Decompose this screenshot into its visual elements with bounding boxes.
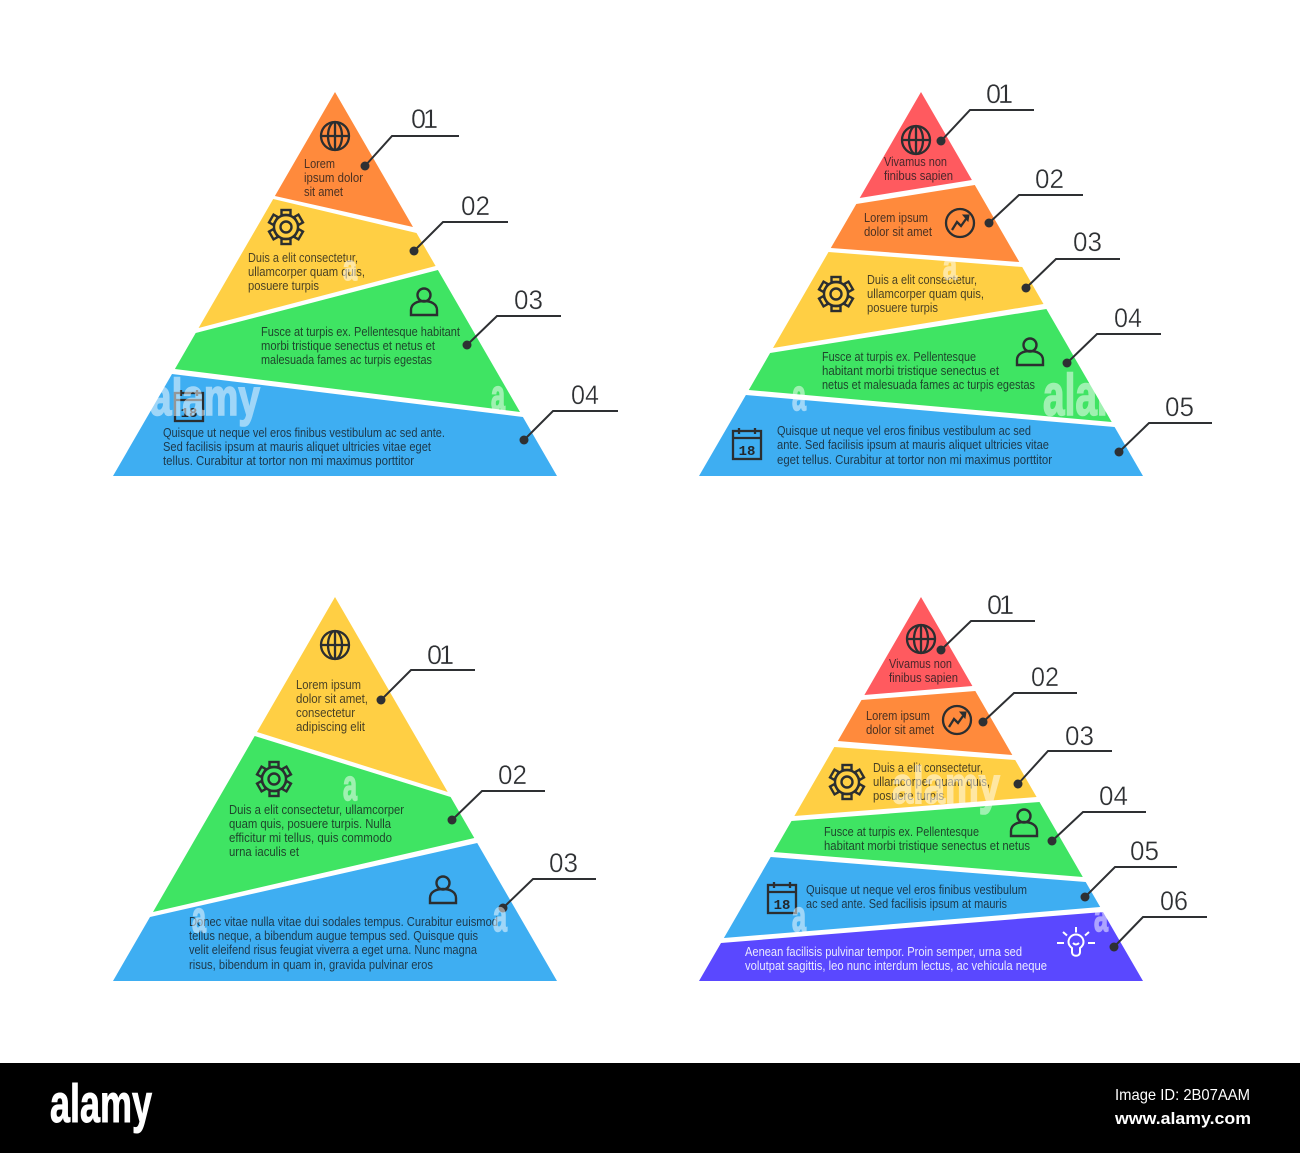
footer url: www.alamy.com xyxy=(1114,1109,1251,1128)
tier 1: orange: ipsum dolor xyxy=(304,171,363,185)
tier 1: yellow: Lorem ipsum xyxy=(296,678,361,692)
watermarks: a xyxy=(491,371,505,420)
watermarks: a xyxy=(343,247,358,288)
icon: person xyxy=(411,288,437,315)
tier 2: orange: Lorem ipsum xyxy=(866,709,930,723)
tier 6: purple: volutpat sagittis, leo nunc interdum lectus, ac vehicula neque xyxy=(745,959,1047,973)
tier 1: red: Vivamus non xyxy=(884,155,947,169)
watermarks: alamy xyxy=(892,757,1000,815)
panel: five-tier pyramid xyxy=(699,79,1212,476)
tier 3: green: Fusce at turpis ex. Pellentesque habitant xyxy=(261,325,460,339)
tier 5: blue: eget tellus. Curabitur at tortor non mi maximus porttitor xyxy=(777,453,1052,467)
tier 2: green: urna iaculis et xyxy=(229,845,299,859)
tier 1: red xyxy=(864,597,972,695)
tier 1: red: finibus sapien xyxy=(884,169,953,183)
tier 3: yellow: Duis a elit consectetur, xyxy=(867,273,977,287)
leader 04 xyxy=(1062,303,1161,368)
leader 02 xyxy=(410,191,508,256)
icon: person xyxy=(1011,810,1037,836)
tier 2: yellow xyxy=(199,199,436,328)
tier 3: green xyxy=(175,270,520,412)
tier 1: orange: sit amet xyxy=(304,185,343,199)
leader 03 xyxy=(1022,227,1120,292)
tier 6: purple xyxy=(699,912,1143,981)
watermarks: a xyxy=(1094,892,1108,941)
leader 03: 03 xyxy=(1065,721,1094,751)
watermarks: a xyxy=(792,892,806,941)
tier 4: green: habitant morbi tristique senectus et xyxy=(822,364,999,378)
tier 2: green: Duis a elit consectetur, ullamcorper xyxy=(229,803,404,817)
tier 3: green: morbi tristique senectus et netus et xyxy=(261,339,435,353)
icon: trend xyxy=(943,706,971,734)
leader 02: 02 xyxy=(1035,164,1064,194)
tier 3: blue: tellus neque, a bibendum augue tempus sed. Quisque quis xyxy=(189,929,478,943)
tier 6: purple: Aenean facilisis pulvinar tempor. Proin semper, urna sed xyxy=(745,945,1022,959)
icon: calendar: 18 xyxy=(739,444,755,460)
tier 1: red: Vivamus non xyxy=(889,657,952,671)
tier 5: blue: Quisque ut neque vel eros finibus vestibulum xyxy=(806,883,1027,897)
tier 2: green: efficitur mi tellus, quis commodo xyxy=(229,831,392,845)
icon: gear xyxy=(830,765,864,799)
tier 3: yellow: ullamcorper quam quis, xyxy=(867,287,984,301)
leader 05 xyxy=(1114,392,1212,456)
leader 02: 02 xyxy=(461,191,490,221)
leader 04: 04 xyxy=(1114,303,1142,333)
tier 2: orange: dolor sit amet xyxy=(866,723,934,737)
tier 1: red xyxy=(860,92,972,198)
tier 2: green: quam quis, posuere turpis. Nulla xyxy=(229,817,391,831)
leader 02 xyxy=(448,760,545,824)
tier 2: yellow: posuere turpis xyxy=(248,279,319,293)
leader 03 xyxy=(498,848,596,912)
tier 1: red: finibus sapien xyxy=(889,671,958,685)
panel: three-tier pyramid xyxy=(113,597,596,981)
icon: calendar: 18 xyxy=(181,406,197,422)
icon: person xyxy=(1017,338,1043,365)
icon: globe xyxy=(902,126,930,154)
tier 3: yellow xyxy=(773,252,1044,348)
tier 1: yellow: consectetur xyxy=(296,706,355,720)
tier 5: blue xyxy=(699,395,1143,476)
tier 4: green xyxy=(749,309,1112,422)
watermarks xyxy=(150,246,1153,942)
tier 4: green: habitant morbi tristique senectus et netus xyxy=(824,839,1030,853)
tier 3: yellow: posuere turpis xyxy=(873,789,944,803)
icon: gear xyxy=(819,277,853,311)
tier 2: green xyxy=(153,736,474,912)
leader 04 xyxy=(520,380,618,444)
tier 5: blue: ac sed ante. Sed facilisis ipsum at mauris xyxy=(806,897,1007,911)
tier 3: yellow: ullamcorper quam quis, xyxy=(873,775,990,789)
tier 2: orange xyxy=(838,691,1012,755)
watermarks: a xyxy=(943,246,958,288)
leader 04 xyxy=(1048,781,1146,846)
tier 4: green xyxy=(774,802,1083,877)
tier 1: yellow: dolor sit amet, xyxy=(296,692,368,706)
leader 02: 02 xyxy=(1031,662,1059,692)
tier 4: green: netus et malesuada fames ac turpis egestas xyxy=(822,378,1035,392)
leader 02 xyxy=(984,164,1083,228)
leader 03: 03 xyxy=(514,285,543,315)
leader 01: 01 xyxy=(411,104,437,134)
tier 2: orange xyxy=(831,185,1019,262)
tier 4: green: Fusce at turpis ex. Pellentesque xyxy=(822,350,976,364)
tier 2: yellow: Duis a elit consectetur, xyxy=(248,251,358,265)
footer image id: Image ID: 2B07AAM xyxy=(1115,1087,1250,1104)
tier 3: blue xyxy=(113,843,557,981)
icon: light bulb xyxy=(1057,927,1095,956)
tier 3: blue: risus, bibendum in quam in, gravida pulvinar eros xyxy=(189,958,433,972)
leader 02: 02 xyxy=(498,760,527,790)
icon: trend xyxy=(946,209,974,237)
tier 5: blue xyxy=(724,857,1100,938)
watermarks: a xyxy=(343,761,357,810)
icon: globe xyxy=(321,122,349,150)
tier 1: orange xyxy=(275,92,413,227)
watermarks: a xyxy=(493,892,507,941)
leader 01: 01 xyxy=(986,79,1012,109)
leader 06: 06 xyxy=(1160,886,1188,916)
footer bar xyxy=(0,1063,1300,1153)
tier 3: yellow: Duis a elit consectetur, xyxy=(873,761,983,775)
watermarks: alamy xyxy=(1043,363,1153,428)
footer logo: alamy xyxy=(50,1074,152,1134)
leader 05 xyxy=(1080,836,1177,902)
tier 1: yellow xyxy=(257,597,448,792)
leader 04: 04 xyxy=(571,380,599,410)
icon: globe xyxy=(907,625,935,653)
watermarks: a xyxy=(792,371,806,420)
tier 4: blue: Sed facilisis ipsum at mauris aliquet ultricies vitae eget xyxy=(163,440,431,454)
tier 4: green: Fusce at turpis ex. Pellentesque xyxy=(824,825,979,839)
tier 3: blue: velit eleifend risus feugiat viverra a eget urna. Nunc magna xyxy=(189,943,477,957)
tier 2: orange: dolor sit amet xyxy=(864,225,932,239)
icon: calendar xyxy=(768,882,796,914)
leader 03: 03 xyxy=(549,848,578,878)
watermarks: alamy xyxy=(150,369,260,427)
icon: calendar xyxy=(175,390,203,422)
tier 5: blue: Quisque ut neque vel eros finibus vestibulum ac sed xyxy=(777,424,1031,438)
icon: gear xyxy=(269,210,303,244)
tier 3: yellow xyxy=(794,747,1037,816)
panel: four-tier pyramid xyxy=(113,92,618,476)
panel: six-tier pyramid xyxy=(699,590,1207,981)
leader 01 xyxy=(376,640,475,704)
leader 01 xyxy=(936,590,1035,654)
icon: calendar: 18 xyxy=(774,898,790,914)
tier 5: blue: ante. Sed facilisis ipsum at mauris aliquet ultricies vitae xyxy=(777,438,1049,452)
watermarks: a xyxy=(192,893,206,942)
leader 01: 01 xyxy=(427,640,453,670)
tier 4: blue xyxy=(113,374,557,476)
tier 4: blue: Quisque ut neque vel eros finibus vestibulum ac sed ante. xyxy=(163,426,445,440)
leader 01 xyxy=(360,104,459,170)
tier 3: green: malesuada fames ac turpis egestas xyxy=(261,353,432,367)
leader 05: 05 xyxy=(1165,392,1194,422)
icon: gear xyxy=(257,762,291,796)
tier 2: orange: Lorem ipsum xyxy=(864,211,928,225)
leader 02 xyxy=(978,662,1077,726)
icon: calendar xyxy=(733,428,761,460)
tier 3: blue: Donec vitae nulla vitae dui sodales tempus. Curabitur euismod xyxy=(189,915,498,929)
leader 05: 05 xyxy=(1130,836,1159,866)
leader 04: 04 xyxy=(1099,781,1128,811)
leader 03: 03 xyxy=(1073,227,1102,257)
icon: globe xyxy=(321,631,349,659)
leader 01: 01 xyxy=(987,590,1013,620)
tier 3: yellow: posuere turpis xyxy=(867,301,938,315)
leader 01 xyxy=(936,79,1034,146)
icon: person xyxy=(430,876,456,903)
leader 03 xyxy=(462,285,561,350)
tier 1: yellow: adipiscing elit xyxy=(296,720,365,734)
tier 2: yellow: ullamcorper quam quis, xyxy=(248,265,365,279)
leader 03 xyxy=(1014,721,1112,788)
leader 06 xyxy=(1110,886,1207,952)
tier 4: blue: tellus. Curabitur at tortor non mi maximus porttitor xyxy=(163,454,414,468)
tier 1: orange: Lorem xyxy=(304,157,335,171)
